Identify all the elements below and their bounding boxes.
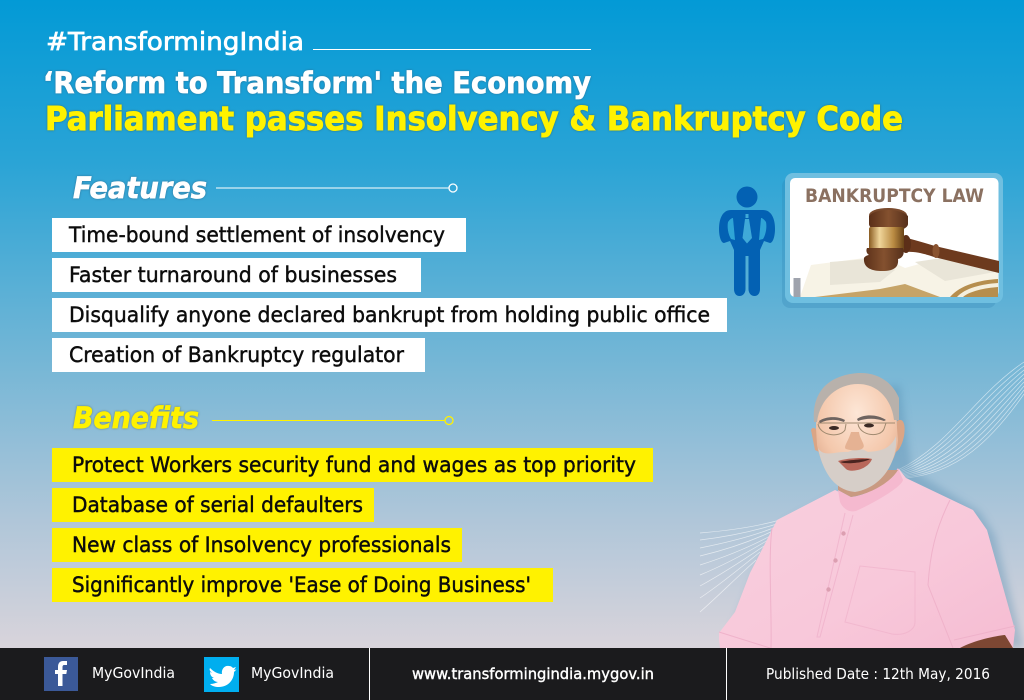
icon: twitter — [204, 657, 239, 692]
hashtag rule — [313, 49, 591, 50]
title line one: ‘Reform to Transform' the Economy — [43, 66, 591, 100]
shirt buttons — [826, 504, 856, 592]
glasses — [818, 423, 895, 435]
ears — [811, 420, 905, 452]
shirt sleeve seams and pocket — [719, 500, 1015, 648]
website url: www.transformingindia.mygov.in — [412, 665, 654, 683]
panel: features list — [52, 218, 727, 372]
benefit item 2 — [52, 488, 374, 522]
right arm gap — [759, 218, 766, 240]
tie — [742, 214, 752, 244]
neck — [838, 470, 898, 497]
illustration: portrait — [719, 373, 1024, 648]
illustration: gavel — [864, 208, 999, 273]
facebook handle: MyGovIndia — [92, 664, 175, 682]
feature item 1 — [52, 218, 466, 252]
feature item 1: Time-bound settlement of insolvency — [68, 223, 445, 247]
face — [816, 380, 898, 490]
feature item 4 — [52, 338, 425, 372]
feature item 3 — [52, 298, 727, 332]
benefits heading: Benefits — [73, 401, 199, 435]
beard — [818, 436, 896, 492]
nose — [845, 432, 864, 450]
icon: facebook — [44, 657, 78, 691]
published date: Published Date : 12th May, 2016 — [766, 665, 990, 683]
benefit item 1 — [52, 448, 653, 482]
benefit item 4: Significantly improve 'Ease of Doing Business' — [72, 573, 531, 597]
features heading: Features — [73, 171, 207, 205]
icon: man with empty pockets — [719, 186, 775, 296]
feature item 2: Faster turnaround of businesses — [69, 263, 397, 287]
mouth — [838, 458, 872, 471]
benefits heading — [73, 401, 453, 435]
feature item 4: Creation of Bankruptcy regulator — [69, 343, 404, 367]
portrait shadow — [727, 385, 1024, 648]
eyes and brows — [819, 415, 886, 430]
hair — [814, 373, 899, 422]
benefit item 1: Protect Workers security fund and wages as top priority — [72, 453, 636, 477]
illustration: book — [794, 254, 998, 297]
left arm gap — [728, 218, 735, 240]
shirt — [719, 469, 1015, 648]
footer bar — [0, 648, 1024, 700]
collar — [838, 468, 903, 511]
forearm — [960, 635, 1013, 648]
decorative wave lines — [700, 362, 1024, 612]
features heading — [73, 171, 457, 205]
panel: bankruptcy law card — [782, 173, 1003, 308]
benefit item 3: New class of Insolvency professionals — [72, 533, 451, 557]
hashtag heading: #TransformingIndia — [46, 27, 304, 56]
feature item 3: Disqualify anyone declared bankrupt from holding public office — [69, 303, 710, 327]
card heading: BANKRUPTCY LAW — [805, 185, 984, 207]
panel: benefits list — [52, 448, 653, 602]
benefit item 4 — [52, 568, 553, 602]
benefit item 2: Database of serial defaulters — [72, 493, 363, 517]
benefit item 3 — [52, 528, 462, 562]
feature item 2 — [52, 258, 421, 292]
title line two: Parliament passes Insolvency & Bankruptcy Code — [45, 99, 903, 138]
twitter handle: MyGovIndia — [251, 664, 334, 682]
